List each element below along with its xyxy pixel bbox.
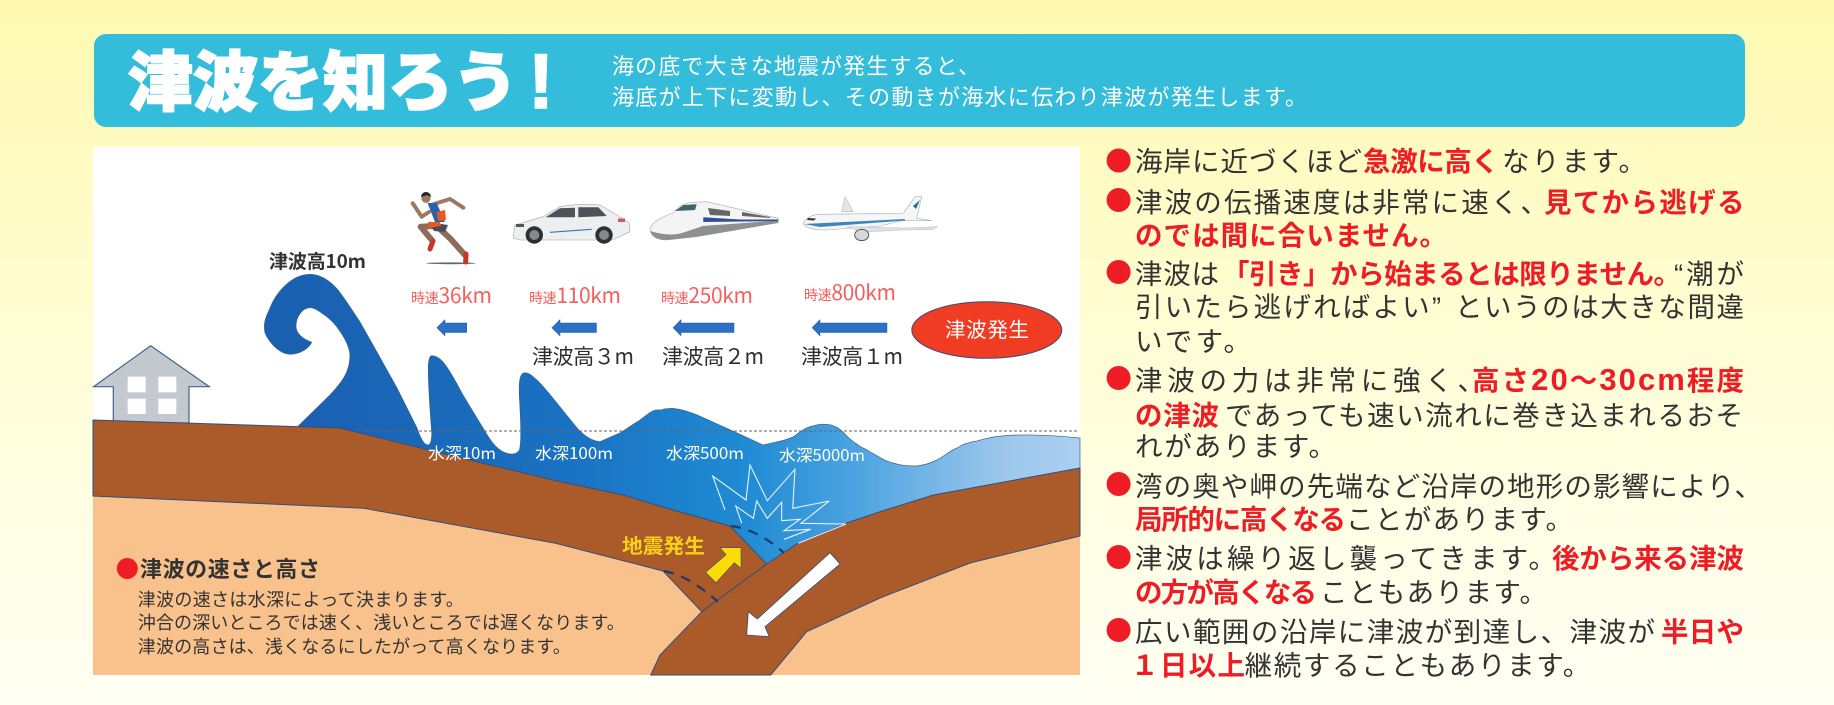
panel: key points list: [1107, 146, 1762, 681]
speed labels: 時速36km: [411, 280, 492, 310]
point 6: [1135, 543, 1744, 608]
text block: speed and height of tsunami: 津波の高さは、浅くなるにしたがって高くなります。: [138, 637, 571, 657]
point 7: 広い範囲の沿岸に津波が到達し、津波が: [1135, 616, 1655, 648]
point 6: こともあります。: [1320, 577, 1547, 608]
point 1: 海岸に近づくほど: [1135, 146, 1362, 177]
oceanic plate: [651, 468, 1080, 675]
point 4: 津波の力は非常に強く、: [1135, 365, 1485, 396]
icon: house: [94, 346, 209, 423]
point 3: 「引き」から始まるとは限りません。: [1222, 258, 1681, 290]
subtitle text: [612, 54, 1307, 110]
icon: runner: [413, 192, 476, 264]
point 3: 引いたら逃げればよい”: [1135, 292, 1441, 322]
point 7: 半日や: [1661, 616, 1744, 648]
point 3: “潮が: [1674, 258, 1744, 290]
seabed base layer: [93, 480, 1080, 675]
icon: earthquake burst: [713, 465, 846, 543]
sea level dotted line: [364, 430, 1078, 432]
water depth labels: 水深500m: [666, 440, 744, 464]
point 4: 高さ20～30cm程度: [1472, 362, 1744, 397]
point 4: であっても速い流れに巻き込まれるおそ: [1225, 400, 1743, 431]
text block: speed and height of tsunami: 津波の速さと高さ: [140, 557, 320, 582]
speed labels: 時速800km: [804, 277, 896, 307]
point 7: 継続することもあります。: [1245, 650, 1590, 681]
water depth labels: 水深10m: [428, 440, 496, 464]
water depth labels: 水深100m: [535, 440, 613, 464]
icon: bullet train: [650, 202, 778, 240]
callout: tsunami origin: 津波発生: [945, 313, 1029, 343]
point 4: の津波: [1135, 400, 1219, 431]
point 6: 津波は繰り返し襲ってきます。: [1135, 543, 1556, 574]
water depth labels: 水深5000m: [779, 442, 865, 466]
water depth labels: [428, 440, 865, 466]
label: earthquake occurs: 地震発生: [622, 530, 705, 559]
point 1: [1135, 146, 1646, 177]
header banner: [94, 34, 1745, 127]
point 5: [1135, 471, 1762, 535]
point 7: [1131, 616, 1744, 681]
text block: speed and height of tsunami: 沖合の深いところでは速く、浅いところでは遅くなります。: [138, 613, 625, 633]
wave height labels: 津波高２m: [662, 341, 764, 371]
arrow: yellow uplift: [706, 548, 741, 583]
point 2: [1135, 187, 1744, 251]
arrow: white subduction: [747, 553, 840, 637]
label: wave height 10m: 津波高10m: [269, 247, 366, 274]
point 7: １日以上: [1131, 650, 1245, 681]
point 5: 湾の奥や岬の先端など沿岸の地形の影響により、: [1135, 471, 1762, 502]
subtitle text: 海底が上下に変動し、その動きが海水に伝わり津波が発生します。: [612, 85, 1307, 110]
point 3: いです。: [1135, 326, 1251, 357]
speed labels: 時速110km: [529, 280, 621, 310]
point 2: のでは間に合いません。: [1135, 220, 1447, 251]
point 6: 後から来る津波: [1552, 543, 1744, 574]
point 5: 局所的に高くなる: [1135, 504, 1346, 535]
wave height labels: [532, 341, 903, 371]
point 5: ことがあります。: [1346, 504, 1573, 535]
subtitle text: 海の底で大きな地震が発生すると、: [612, 54, 980, 79]
speed labels: [411, 277, 896, 310]
point 3: [1135, 258, 1744, 357]
callout: tsunami origin: [912, 302, 1062, 358]
point 4: れがあります。: [1135, 431, 1336, 462]
point 6: の方が高くなる: [1135, 577, 1317, 608]
point 3: 津波は: [1135, 258, 1219, 290]
direction arrows: [437, 320, 887, 336]
text block: speed and height of tsunami: [117, 557, 625, 657]
title: !: [528, 37, 554, 125]
text block: speed and height of tsunami: 津波の速さは水深によって決まります。: [138, 590, 464, 610]
point 4: [1135, 362, 1744, 462]
ocean and tsunami waves: [264, 274, 1080, 570]
point 2: 津波の伝播速度は非常に速く、: [1135, 187, 1548, 218]
icon: car: [513, 204, 630, 244]
point 1: 急激に高く: [1363, 146, 1499, 177]
continental plate: [93, 420, 767, 612]
wave height labels: 津波高１m: [801, 341, 903, 371]
point 2: 見てから逃げる: [1544, 187, 1744, 218]
icon: airplane: [803, 197, 938, 241]
point 1: なります。: [1502, 146, 1646, 177]
wave height labels: 津波高３m: [532, 341, 634, 371]
point 3: というのは大きな間違: [1455, 292, 1744, 322]
title: 津波を知ろう: [128, 46, 518, 119]
bullet markers: [1107, 148, 1131, 642]
fault dashed lines: [664, 526, 784, 602]
speed labels: 時速250km: [661, 280, 753, 310]
panel: tsunami cross-section diagram: [93, 147, 1080, 675]
